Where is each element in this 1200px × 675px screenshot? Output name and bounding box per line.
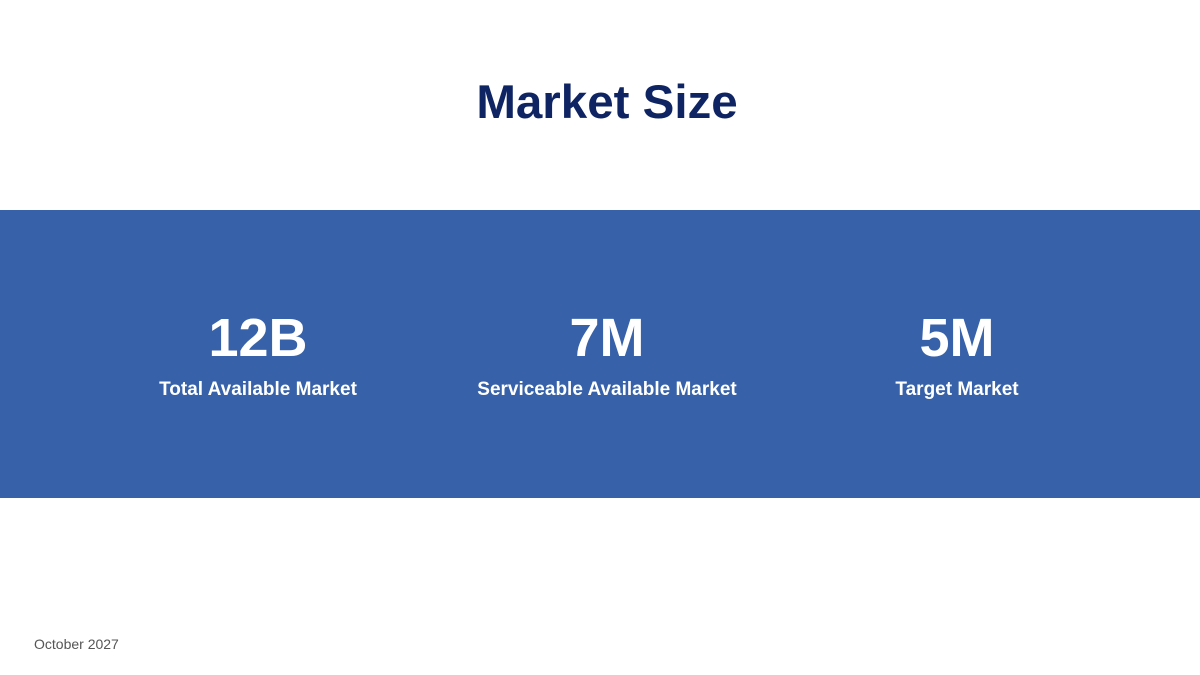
stat: target market bbox=[895, 308, 1019, 400]
stat: serviceable available market: Serviceable Available Market bbox=[477, 379, 737, 400]
stat: total available market bbox=[159, 308, 357, 400]
panel: stats band bbox=[0, 210, 1200, 498]
date footer: October 2027 bbox=[34, 636, 119, 652]
stat: serviceable available market: 7M bbox=[569, 308, 644, 368]
title: Market Size bbox=[476, 76, 738, 129]
stat: total available market: Total Available Market bbox=[159, 379, 357, 400]
stat: target market: Target Market bbox=[895, 379, 1019, 400]
stat: total available market: 12B bbox=[208, 308, 308, 368]
stat: target market: 5M bbox=[919, 308, 994, 368]
stat: serviceable available market bbox=[477, 308, 737, 400]
